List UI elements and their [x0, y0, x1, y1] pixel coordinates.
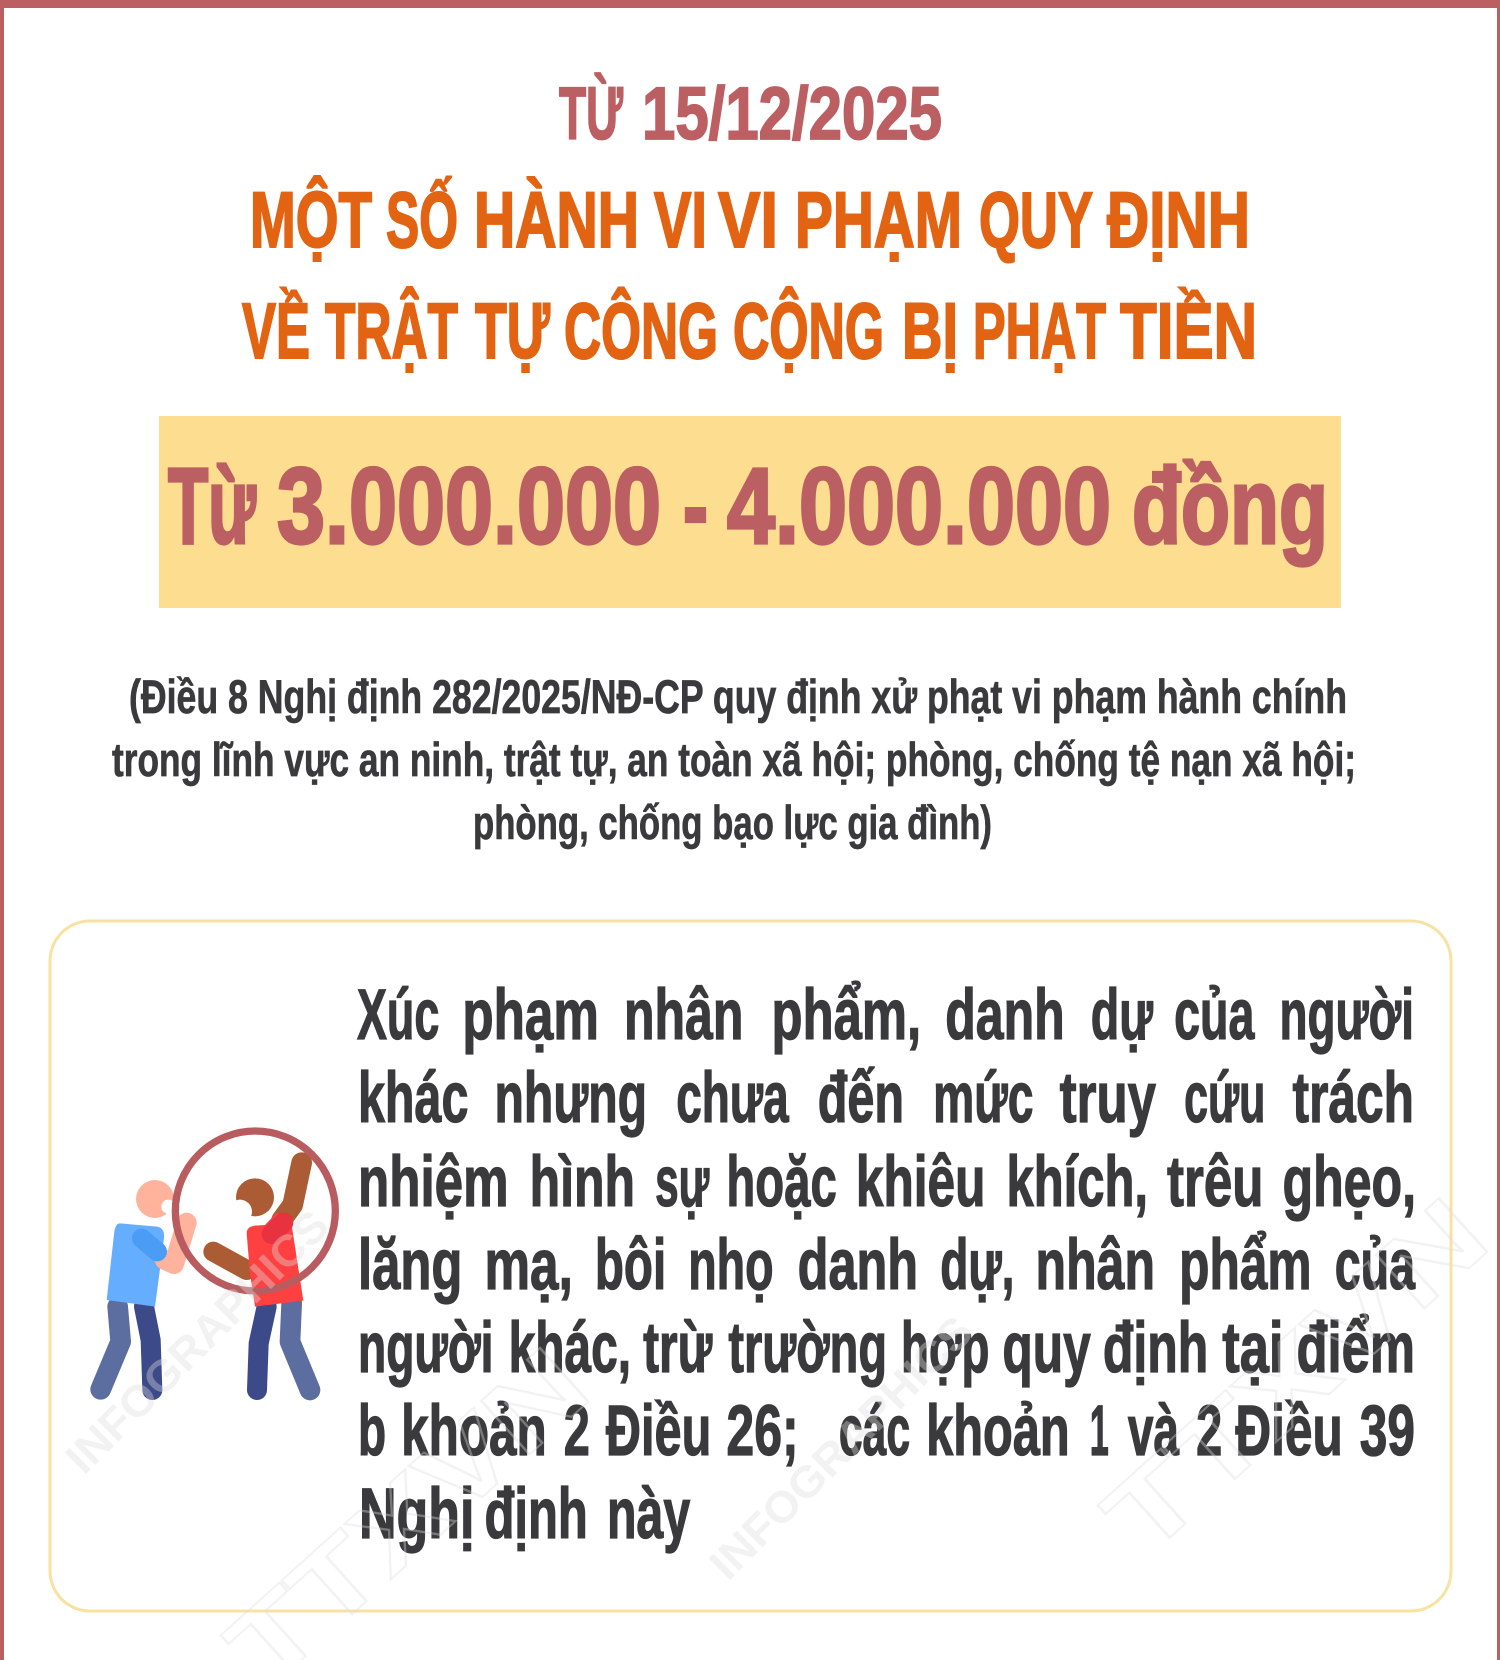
icon: two people fighting [101, 1131, 335, 1390]
heading line 2 [242, 286, 1257, 375]
violation description: b [358, 1392, 386, 1471]
violation description: trách [1293, 1059, 1414, 1138]
violation description: Điều [1235, 1392, 1343, 1471]
heading line 1: QUY [979, 175, 1093, 264]
violation description: nhân [624, 976, 743, 1055]
violation description: tại [1222, 1309, 1284, 1388]
violation description: khiêu [856, 1143, 985, 1222]
violation description: dự [1091, 976, 1153, 1055]
violation description: nhiệm [358, 1143, 509, 1222]
violation description: phạm [462, 976, 599, 1055]
violation description: cứu [1184, 1059, 1265, 1138]
violation description: ghẹo, [1282, 1143, 1416, 1222]
watermark: INFOGRAPHICS [700, 1307, 983, 1589]
violation description: danh [945, 976, 1065, 1055]
violation description: danh [798, 1226, 918, 1305]
heading line 1: PHẠM [795, 175, 962, 264]
violation description: 2 [1196, 1392, 1222, 1471]
violation description: định [1103, 1309, 1208, 1388]
violation description: bôi [595, 1226, 666, 1305]
watermark: INFOGRAPHICS [56, 1201, 339, 1483]
heading line 2: TIỀN [1120, 286, 1257, 375]
violation description: của [1174, 976, 1255, 1055]
violation description [357, 976, 1416, 1554]
date heading: 15/12/2025 [642, 72, 942, 155]
violation description: khoản [401, 1392, 547, 1471]
violation description: quy [1002, 1309, 1091, 1388]
violation description: hợp [901, 1309, 989, 1388]
violation description: khác, [509, 1309, 631, 1388]
date heading [559, 72, 942, 155]
violation description: đến [818, 1059, 904, 1138]
violation description: lăng [358, 1226, 462, 1305]
violation description: nhân [1036, 1226, 1155, 1305]
violation description: dự, [940, 1226, 1014, 1305]
violation description: người [1279, 976, 1414, 1055]
title block [242, 72, 1257, 375]
heading line 1 [250, 175, 1250, 264]
violation description: 1 [1090, 1392, 1109, 1471]
violation description: trường [728, 1309, 887, 1388]
heading line 1: ĐỊNH [1107, 175, 1250, 264]
violation description: điểm [1297, 1309, 1415, 1388]
violation description: khoản [926, 1392, 1070, 1471]
heading line 1: VI [654, 175, 707, 264]
heading line 1: MỘT [250, 175, 372, 264]
violation description: nhưng [495, 1059, 647, 1138]
violation description: khác [358, 1059, 468, 1138]
panel: violation [50, 921, 1451, 1611]
violation description: truy [1060, 1059, 1156, 1138]
heading line 2: TỰ [475, 286, 550, 375]
heading line 2: TRẬT [325, 286, 458, 375]
fine amount: đồng [1132, 445, 1328, 566]
violation description: trêu [1167, 1143, 1263, 1222]
violation description: trừ [643, 1309, 713, 1388]
violation description: Điều [606, 1392, 711, 1471]
watermark: TTXVN [1082, 1176, 1500, 1577]
violation description: 2 [564, 1392, 590, 1471]
heading line 2: VỀ [242, 286, 310, 375]
violation description: mức [933, 1059, 1034, 1138]
violation description: 26; [726, 1392, 799, 1471]
heading line 2: BỊ [902, 286, 958, 375]
violation description: phẩm, [772, 976, 921, 1055]
heading line 1: HÀNH [474, 175, 639, 264]
fine amount: Từ [168, 445, 256, 566]
legal citation [112, 670, 1356, 849]
violation description: phẩm [1179, 1226, 1312, 1305]
heading line 2: CÔNG [564, 286, 718, 375]
watermark [56, 1176, 1500, 1660]
violation description: hình [530, 1143, 635, 1222]
violation description: Nghị [359, 1475, 474, 1554]
date heading: TỪ [559, 72, 623, 155]
heading line 1: SỐ [386, 175, 458, 264]
violation description: sự [655, 1143, 710, 1222]
violation description: khích, [1006, 1143, 1148, 1222]
violation description: và [1128, 1392, 1179, 1471]
fine amount: 3.000.000 [277, 445, 661, 566]
heading line 2: PHẠT [973, 286, 1106, 375]
heading line 1: VI [718, 175, 778, 264]
heading line 2: CỘNG [733, 286, 884, 375]
violation description: hoặc [726, 1143, 837, 1222]
legal citation: phòng, chống bạo lực gia đình) [473, 796, 992, 849]
violation description: Xúc [357, 976, 439, 1055]
fine amount: 4.000.000 [727, 445, 1111, 566]
violation description: chưa [676, 1059, 790, 1138]
fine amount banner [159, 416, 1341, 608]
violation description: người [358, 1309, 494, 1388]
violation description: định [484, 1475, 588, 1554]
violation description: của [1335, 1226, 1416, 1305]
violation description: mạ, [484, 1226, 573, 1305]
violation description: 39 [1360, 1392, 1415, 1471]
violation description: các [839, 1392, 910, 1471]
violation description: nhọ [688, 1226, 774, 1305]
fine amount: - [683, 445, 708, 566]
fine amount [168, 445, 1328, 566]
violation description: này [607, 1475, 691, 1554]
